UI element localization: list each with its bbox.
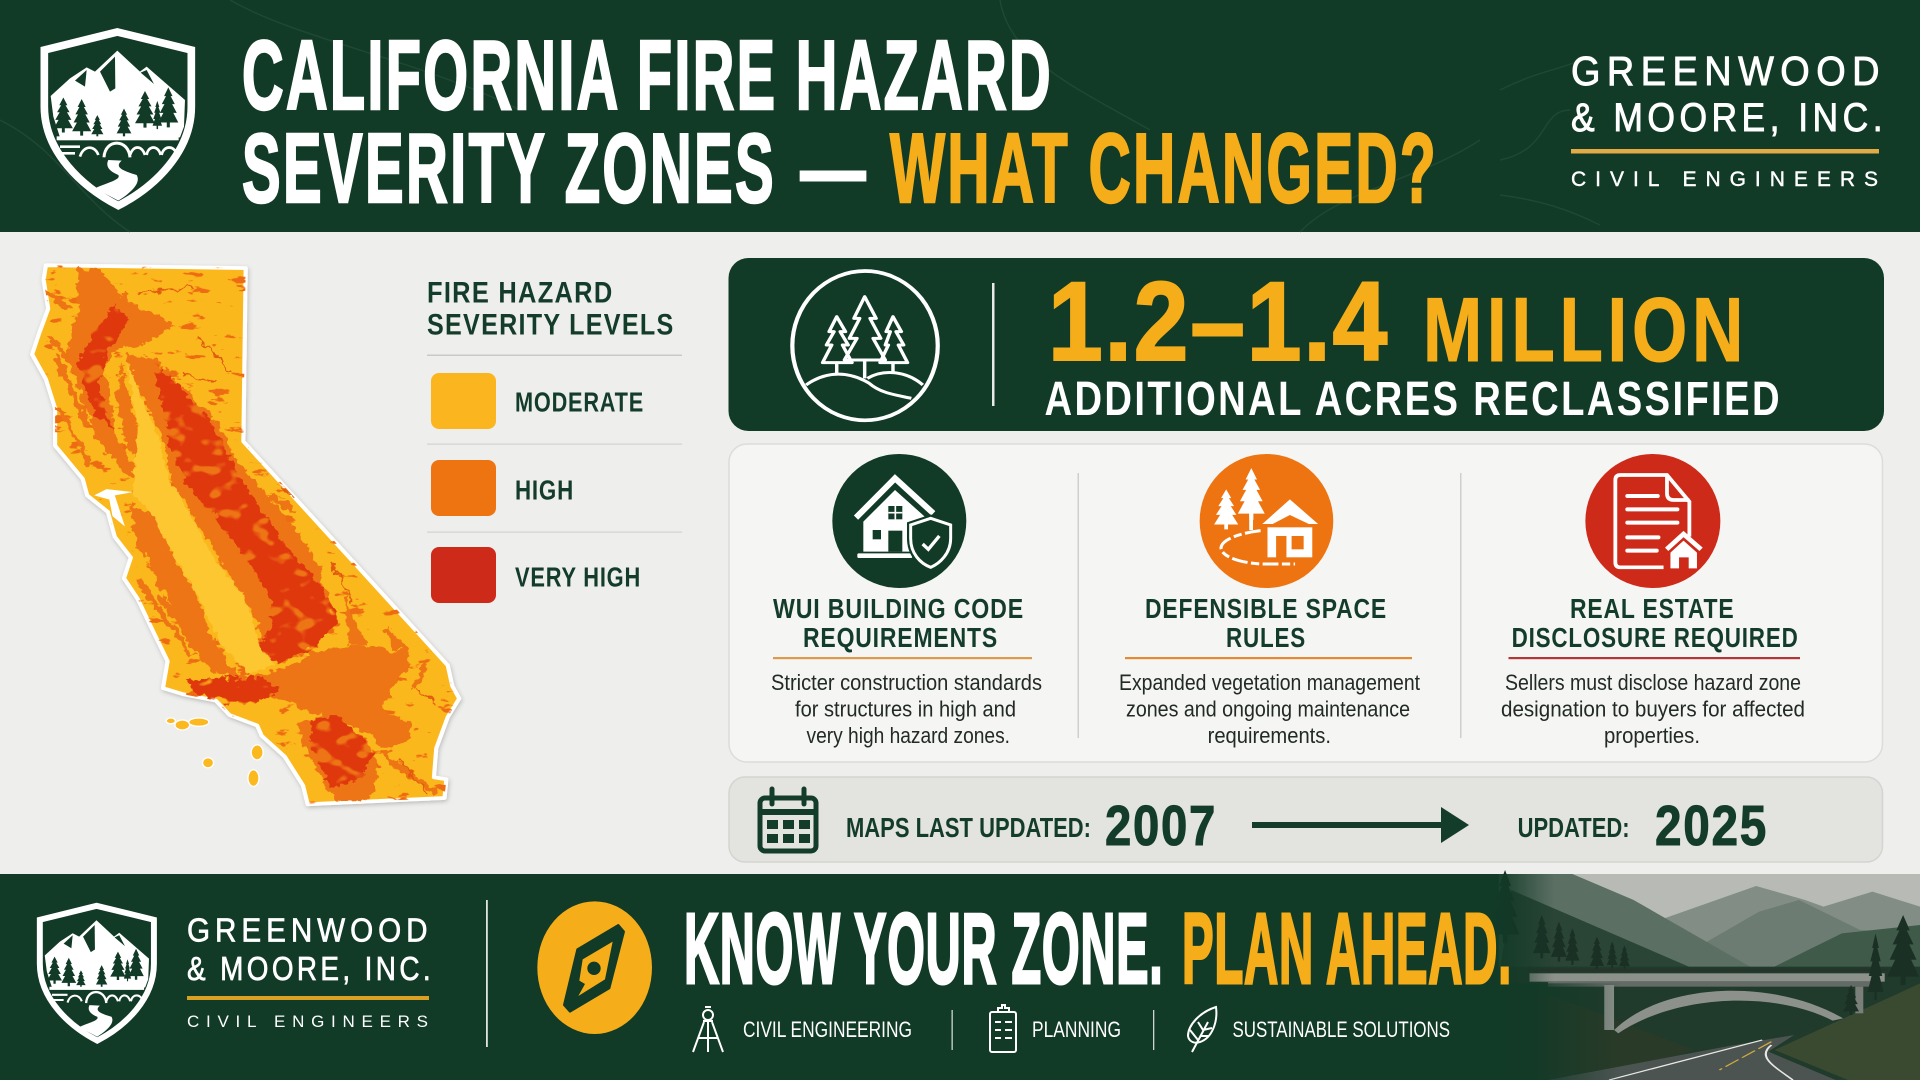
legend: high: HIGH [515, 474, 574, 506]
icon: trees on hills [792, 271, 938, 420]
arrow [1252, 807, 1469, 843]
stat number [1048, 259, 1748, 384]
card title [1145, 593, 1387, 653]
footer company name: GREENWOOD [187, 912, 432, 948]
header company name: GREENWOOD [1571, 48, 1886, 94]
stat number: 1.2–1.4 [1048, 259, 1389, 384]
footer logo crest [40, 906, 154, 1041]
year 2007: 2007 [1105, 794, 1217, 858]
card body: zones and ongoing maintenance [1126, 696, 1410, 722]
central valley highlight [126, 363, 276, 674]
footer band: PLAN AHEAD. [1182, 893, 1512, 1005]
card body: requirements. [1208, 723, 1331, 748]
card body: very high hazard zones. [806, 723, 1010, 748]
card title: RULES [1226, 622, 1306, 653]
service: sustainable solutions: SUSTAINABLE SOLUTIONS [1232, 1017, 1450, 1042]
footer band [0, 870, 1920, 1080]
legend: high [431, 460, 574, 516]
service: sustainable solutions [1188, 1007, 1450, 1052]
card body: Expanded vegetation management [1119, 670, 1420, 695]
label: maps last updated: MAPS LAST UPDATED: [846, 812, 1091, 843]
title: WHAT CHANGED? [890, 113, 1438, 223]
title: — [800, 113, 866, 225]
hazard zones [28, 263, 464, 806]
legend: very high [431, 547, 641, 603]
card title [773, 593, 1024, 653]
legend heading: SEVERITY LEVELS [427, 308, 674, 342]
card body: properties. [1604, 723, 1700, 748]
card: WUI building code [771, 454, 1042, 748]
bay area gap [94, 489, 133, 526]
card title: DEFENSIBLE SPACE [1145, 593, 1387, 624]
footer company name: CIVIL ENGINEERS [187, 1012, 428, 1031]
header company name: CIVIL ENGINEERS [1571, 168, 1878, 191]
header company name: & MOORE, INC. [1571, 96, 1887, 140]
stat number: MILLION [1423, 280, 1748, 381]
card title: DISCLOSURE REQUIRED [1512, 622, 1799, 653]
card title [1512, 593, 1799, 653]
scattered hazard speckle [28, 263, 464, 806]
state outline [32, 265, 459, 804]
year 2025: 2025 [1655, 794, 1768, 858]
card body: Stricter construction standards [771, 670, 1042, 695]
slogan: KNOW YOUR ZONE. [684, 893, 1164, 1005]
panel: map update timeline [729, 777, 1882, 862]
card body [1501, 670, 1805, 748]
legend heading: FIRE HAZARD [427, 276, 614, 310]
footer landscape: mountains, bridge and road [1474, 870, 1920, 1080]
very high zones [78, 305, 374, 790]
channel islands [166, 718, 263, 786]
header logo crest [44, 32, 191, 206]
legend heading [427, 276, 674, 342]
service: civil engineering: CIVIL ENGINEERING [743, 1017, 912, 1042]
card: real estate disclosure [1501, 454, 1805, 748]
icon: document with house [1585, 454, 1720, 588]
footer company name [187, 912, 434, 1031]
card body: for structures in high and [795, 696, 1016, 722]
card title: REQUIREMENTS [803, 622, 998, 653]
label: updated: UPDATED: [1518, 812, 1630, 843]
icon: trees and house with dashed perimeter [1200, 454, 1333, 588]
footer company name: & MOORE, INC. [187, 950, 434, 987]
card body: designation to buyers for affected [1501, 696, 1805, 722]
legend: very high: VERY HIGH [515, 562, 641, 592]
icon: calendar [760, 789, 816, 851]
header company name [1571, 48, 1887, 191]
title [242, 20, 1438, 225]
card body: Sellers must disclose hazard zone [1505, 670, 1801, 695]
card title: REAL ESTATE [1570, 593, 1734, 624]
icon: compass [537, 901, 652, 1034]
card: defensible space [1119, 454, 1420, 748]
legend: moderate: MODERATE [515, 386, 644, 418]
header band [0, 0, 1920, 232]
title: CALIFORNIA FIRE HAZARD [242, 20, 1053, 130]
service: planning: PLANNING [1032, 1017, 1121, 1042]
card body [771, 670, 1042, 748]
title: SEVERITY ZONES [242, 113, 776, 223]
icon: house with shield [832, 454, 966, 588]
card body [1119, 670, 1420, 748]
card title: WUI BUILDING CODE [773, 593, 1024, 624]
panel: three requirements [729, 444, 1882, 762]
high zones [46, 267, 436, 801]
panel: acres reclassified stat [728, 258, 1884, 431]
service: civil engineering [693, 1007, 912, 1052]
service: planning [990, 1005, 1121, 1052]
california hazard map [28, 263, 464, 806]
legend: moderate [431, 373, 644, 429]
legend: fire hazard severity levels [427, 276, 682, 603]
